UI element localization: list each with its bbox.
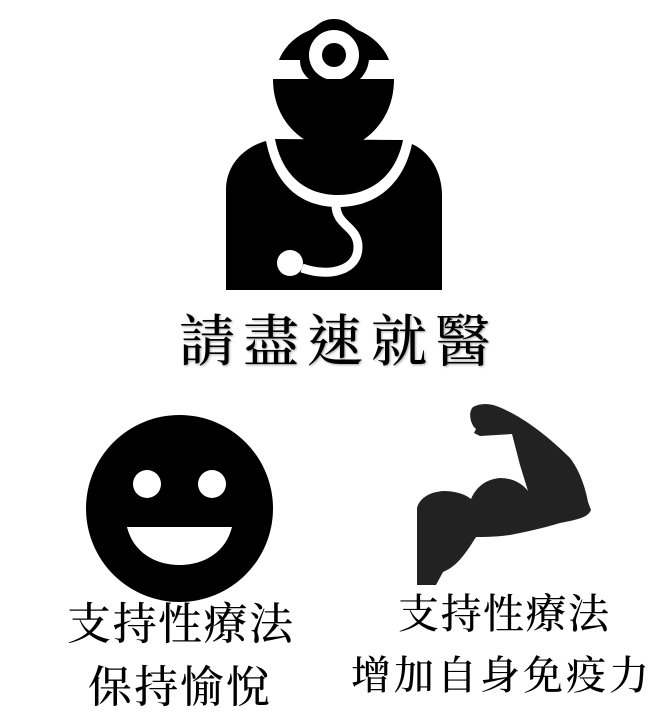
text: stay cheerful: 保持愉悅	[88, 663, 272, 712]
text: supportive therapy, right: 支持性療法	[398, 591, 611, 637]
stethoscope tube	[277, 205, 358, 276]
icon: smiling face	[86, 415, 273, 602]
doctor face and neck	[273, 79, 394, 140]
text: supportive therapy, left: 支持性療法	[67, 600, 295, 649]
icon: flexed arm	[417, 404, 591, 585]
text: boost your immunity: 增加自身免疫力	[351, 653, 652, 698]
doctor collar	[275, 139, 403, 195]
doctor body	[226, 141, 442, 290]
doctor head mirror cap	[279, 19, 389, 79]
head mirror ring	[309, 30, 359, 80]
icon: doctor with head mirror and stethoscope	[226, 19, 442, 290]
heading: see a doctor: 請盡速就醫	[179, 312, 499, 374]
